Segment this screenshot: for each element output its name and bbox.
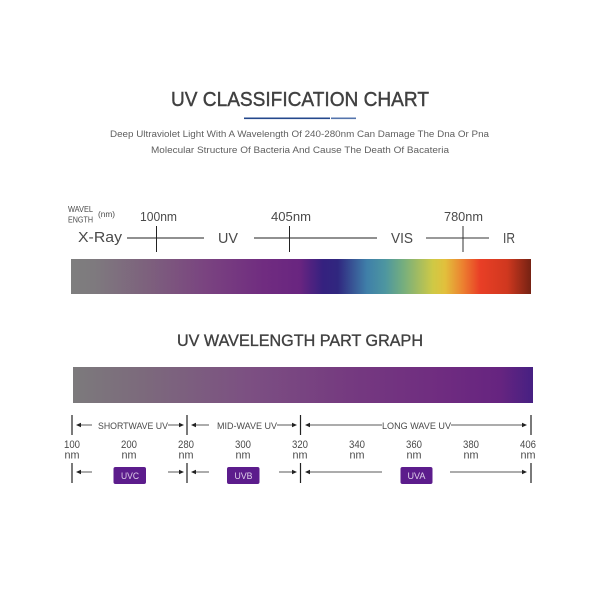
- wavelength tick labels: nm: [236, 450, 251, 462]
- wavelength axis label: (nm): [98, 210, 115, 219]
- label: IR: IR: [503, 230, 515, 247]
- wavelength tick labels: nm: [406, 450, 422, 462]
- range dimension row: [72, 415, 531, 435]
- label: 405nm: 405nm: [271, 209, 311, 224]
- wavelength axis label: ENGTH: [68, 216, 93, 224]
- wavelength tick labels: 300: [235, 439, 251, 451]
- badge: UVB: [227, 467, 260, 484]
- wavelength tick labels: nm: [350, 450, 365, 462]
- badge: UVC: [114, 467, 146, 484]
- wavelength tick labels: 100: [64, 439, 80, 451]
- badge: UVA: UVA: [408, 471, 426, 482]
- full spectrum bar: [71, 259, 531, 294]
- wavelength axis label: [68, 205, 115, 224]
- wavelength tick labels: nm: [64, 450, 80, 462]
- wavelength tick labels: 406: [520, 439, 536, 451]
- tick: 405nm: [254, 226, 377, 252]
- wavelength tick labels: 200: [121, 439, 137, 451]
- wavelength tick labels: 320: [292, 439, 308, 451]
- shortwave UV range: [72, 415, 187, 435]
- title: UV CLASSIFICATION CHART: [171, 89, 429, 111]
- title underline: [244, 118, 356, 119]
- description text: Deep Ultraviolet Light With A Wavelength Of 240-280nm Can Damage The Dna Or Pna: [110, 129, 489, 139]
- wavelength tick labels: 360: [406, 439, 422, 451]
- wavelength tick labels: nm: [520, 450, 536, 462]
- long wave UV range: [305, 415, 531, 435]
- badge: UVC: UVC: [121, 471, 139, 482]
- wavelength tick labels: nm: [122, 450, 137, 462]
- tick: 780nm: [426, 226, 489, 252]
- wavelength tick labels: 380: [463, 439, 479, 451]
- wavelength axis label: WAVEL: [68, 205, 94, 214]
- UV part bar: [73, 367, 533, 403]
- long wave UV range: LONG WAVE UV: [382, 421, 452, 432]
- wavelength tick labels: [64, 439, 536, 462]
- description text: [110, 129, 489, 155]
- mid-wave UV range: MID-WAVE UV: [217, 421, 278, 432]
- section heading: UV WAVELENGTH PART GRAPH: [177, 331, 423, 350]
- wavelength tick labels: 280: [178, 439, 194, 451]
- spectrum scale: [78, 209, 515, 252]
- tick: 100nm: [127, 226, 204, 252]
- badge: UVB: UVB: [234, 471, 252, 482]
- label: 780nm: 780nm: [444, 209, 483, 224]
- wavelength tick labels: nm: [292, 450, 308, 462]
- band dimension row: [72, 463, 531, 483]
- badge: UVA: [400, 467, 432, 484]
- label: VIS: VIS: [391, 230, 413, 247]
- label: X-Ray: X-Ray: [78, 229, 123, 246]
- wavelength tick labels: nm: [178, 450, 194, 462]
- mid-wave UV range: [191, 415, 300, 435]
- label: UV: UV: [218, 230, 238, 247]
- shortwave UV range: SHORTWAVE UV: [98, 421, 169, 432]
- wavelength tick labels: nm: [464, 450, 479, 462]
- label: 100nm: 100nm: [140, 209, 177, 224]
- description text: Molecular Structure Of Bacteria And Cause The Death Of Bacateria: [151, 145, 449, 155]
- wavelength tick labels: 340: [349, 439, 365, 451]
